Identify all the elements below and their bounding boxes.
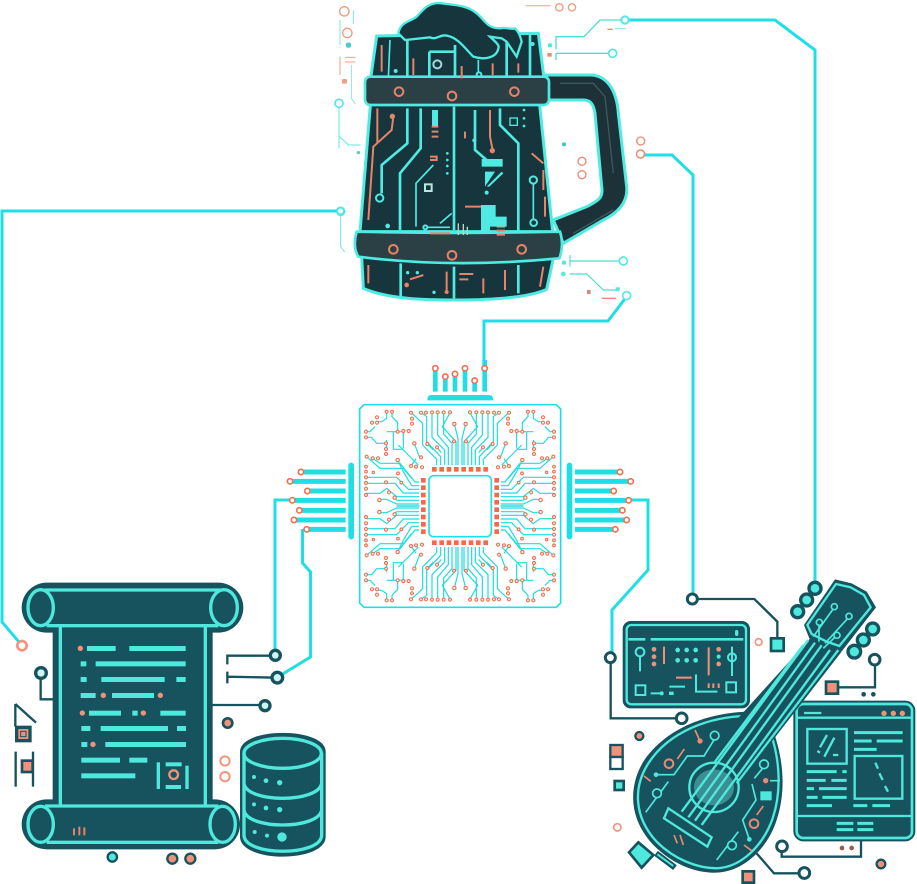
mandolin body bbox=[633, 712, 783, 873]
scroll bbox=[15, 583, 326, 864]
mug handle bbox=[547, 75, 627, 243]
mandolin headstock bbox=[804, 579, 876, 651]
mug surrounding circuit bits, right bbox=[526, 4, 645, 300]
mug circuit accents bbox=[368, 42, 545, 294]
chip bbox=[287, 360, 633, 607]
chip right connector bbox=[567, 463, 633, 539]
wire end: mug left node bbox=[337, 208, 344, 214]
connector wire: mug to control panel bbox=[645, 155, 693, 594]
scroll side connectors bbox=[17, 641, 283, 864]
chip board outline bbox=[360, 405, 561, 607]
mug bbox=[335, 3, 645, 300]
mandolin strings and neck lines bbox=[682, 640, 838, 825]
connector wire: chip to control panel bbox=[612, 500, 648, 652]
scroll left icons bbox=[15, 704, 36, 787]
mug panel lines bbox=[382, 35, 530, 298]
mug base bbox=[362, 257, 553, 300]
mandolin bridge bbox=[664, 808, 712, 847]
scroll top roller bbox=[22, 583, 243, 633]
mandolin end pin bbox=[629, 842, 675, 868]
chip top connector bbox=[427, 360, 493, 400]
wire end: mug right orange node bbox=[636, 150, 644, 158]
chip traces and pads bbox=[364, 410, 555, 602]
mug upper body bbox=[371, 33, 544, 78]
connector wire: chip to scroll lower bbox=[281, 529, 310, 675]
mandolin sound hole bbox=[694, 769, 734, 805]
scroll cyan outlines bbox=[28, 590, 237, 842]
scroll text lines bbox=[81, 646, 189, 789]
mandolin neck bbox=[702, 635, 842, 787]
mug main body bbox=[360, 102, 553, 232]
connector wire: mug to chip bbox=[484, 296, 627, 368]
mandolin tuners bbox=[792, 582, 879, 658]
mandolin and panels bbox=[605, 579, 915, 883]
band rivets bbox=[389, 87, 526, 260]
mandolin wires bbox=[605, 594, 885, 883]
scroll bottom roller bbox=[22, 799, 240, 849]
web window panel bbox=[793, 701, 915, 841]
foam bbox=[398, 3, 522, 58]
control panel bbox=[623, 621, 750, 708]
scroll tally marks bbox=[74, 827, 84, 835]
connector wire: mug to scroll bbox=[2, 211, 340, 642]
scroll seal bbox=[169, 770, 178, 779]
mug surrounding circuit bits, left bbox=[335, 7, 361, 252]
scroll paper bbox=[53, 625, 213, 805]
scroll orange dots bbox=[78, 646, 163, 747]
connector wire: chip to scroll upper bbox=[275, 500, 293, 650]
mandolin body circuits bbox=[644, 730, 780, 860]
chip left connector bbox=[287, 463, 354, 539]
chip die bbox=[429, 476, 491, 537]
mug metal bands bbox=[365, 77, 549, 105]
database bbox=[240, 733, 326, 857]
connector wire: mug to mandolin headstock bbox=[625, 20, 815, 586]
